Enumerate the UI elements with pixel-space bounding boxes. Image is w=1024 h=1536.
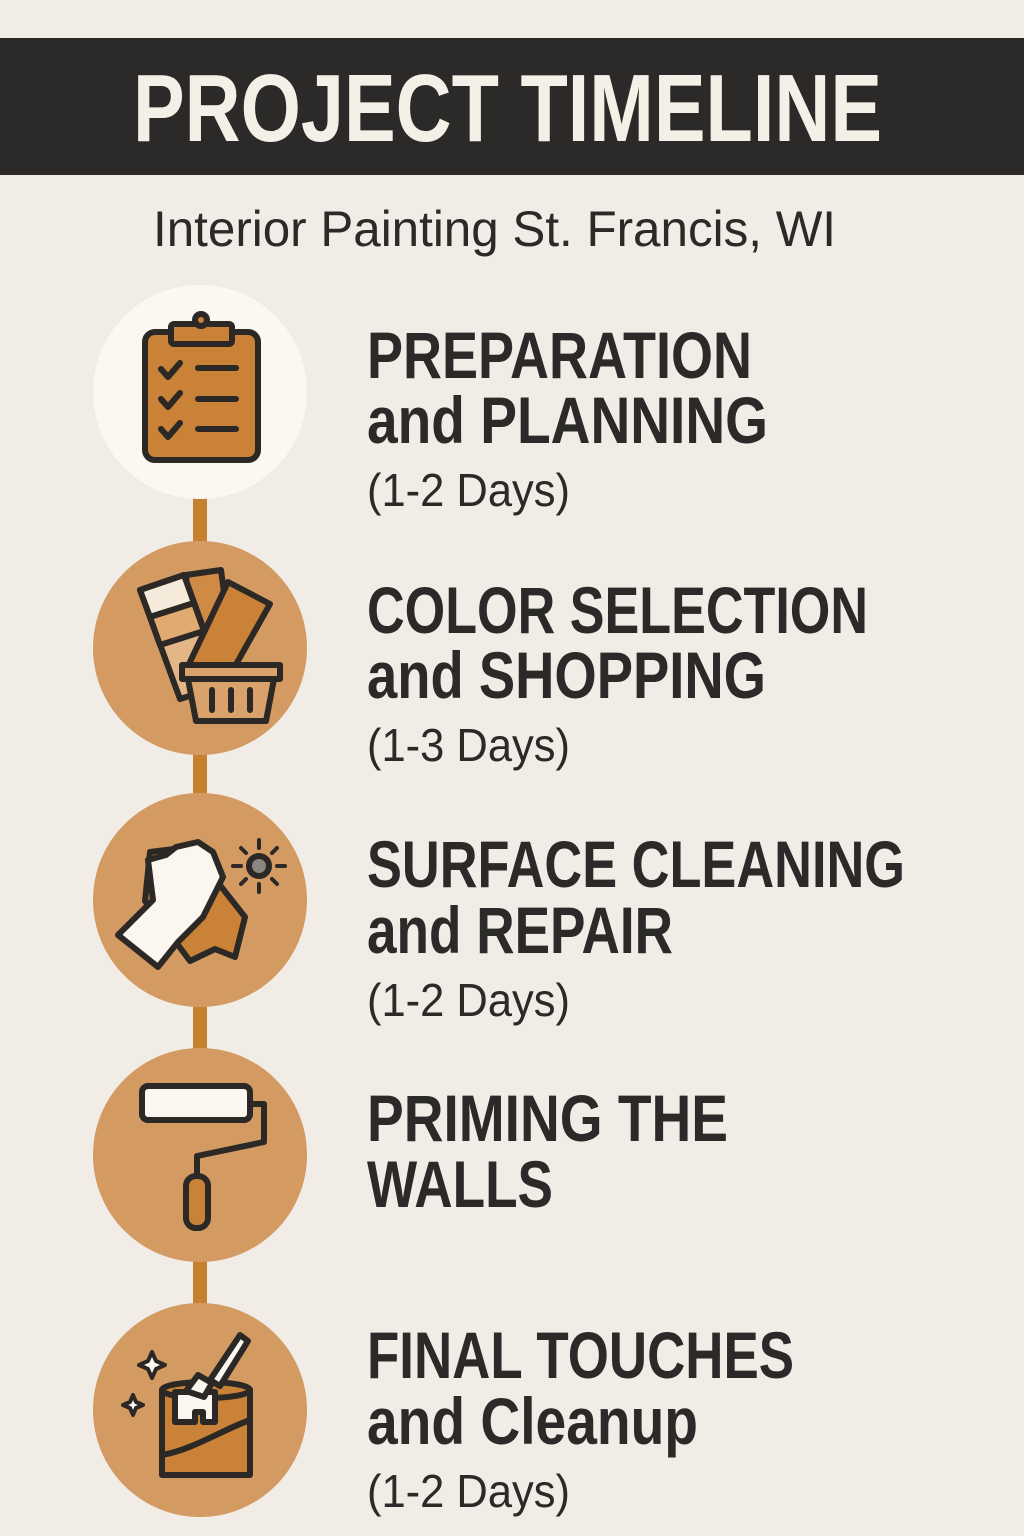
header bar [0, 38, 1024, 175]
heading 2 [367, 573, 868, 771]
heading 5 [367, 1318, 794, 1517]
heading 2: COLOR SELECTION [367, 573, 868, 647]
heading 4: WALLS [367, 1147, 553, 1221]
heading 1: and PLANNING [367, 383, 768, 457]
timeline connector [193, 392, 207, 1410]
icon: swatches and basket [140, 570, 280, 721]
heading 5: FINAL TOUCHES [367, 1318, 794, 1392]
heading 3: and REPAIR [367, 893, 673, 967]
heading 5: and Cleanup [367, 1384, 698, 1458]
heading 1: PREPARATION [367, 318, 752, 392]
heading 2: and SHOPPING [367, 638, 766, 712]
heading 3 [367, 827, 905, 1026]
heading 1: (1-2 Days) [367, 464, 570, 516]
step 3: surface cleaning [93, 793, 905, 1026]
step 2: color selection [93, 541, 868, 771]
icon: paint roller [142, 1086, 264, 1228]
icon: paint can and brush [123, 1335, 250, 1475]
heading 5: (1-2 Days) [367, 1465, 570, 1517]
heading 2: (1-3 Days) [367, 719, 570, 771]
heading 1 [367, 318, 768, 516]
heading 3: (1-2 Days) [367, 974, 570, 1026]
subtitle: Interior Painting St. Francis, WI [153, 201, 836, 257]
step 5: final touches [93, 1303, 794, 1517]
heading 4: PRIMING THE [367, 1081, 728, 1155]
icon: clipboard [93, 285, 307, 499]
step 1: preparation [93, 285, 768, 516]
step 4: priming [93, 1048, 728, 1262]
heading 4 [367, 1081, 728, 1221]
icon: glove and sponge [118, 840, 285, 967]
